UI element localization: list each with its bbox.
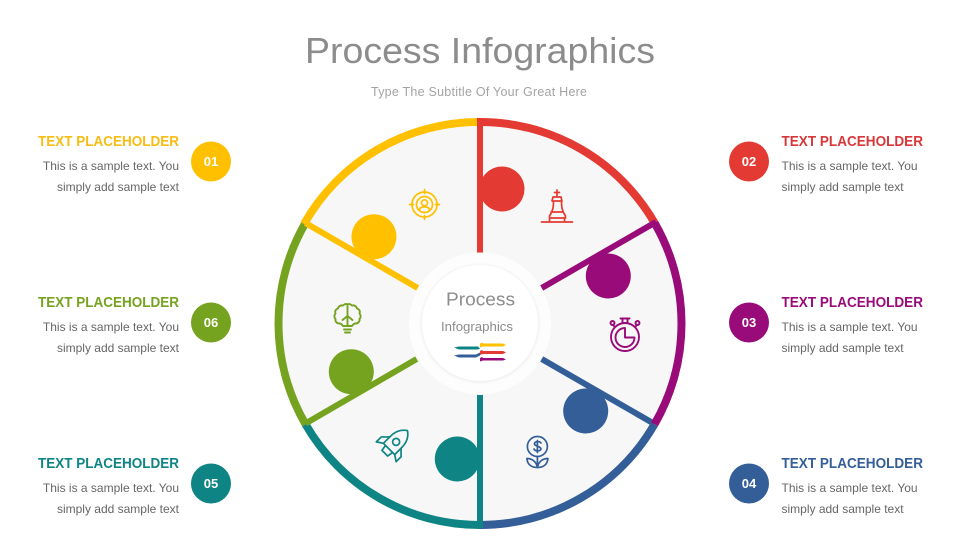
icon: ribbons: [454, 342, 506, 362]
item 05 number: 05: [204, 476, 218, 491]
item 01 heading: TEXT PLACEHOLDER: [38, 134, 179, 150]
icon: rocket: [375, 421, 417, 463]
item 01 number: 01: [204, 154, 218, 169]
title: Process Infographics: [305, 30, 655, 71]
item 01 badge: [191, 142, 231, 182]
item 05 heading: TEXT PLACEHOLDER: [38, 456, 179, 472]
item 02 number: 02: [742, 154, 756, 169]
item 01 body: simply add sample text: [57, 180, 180, 194]
hub inner circle: [422, 265, 538, 381]
hub title: Process: [446, 290, 515, 310]
icon: stopwatch: [610, 318, 640, 351]
hub shadow: [422, 265, 538, 382]
item 04 heading: TEXT PLACEHOLDER: [782, 456, 923, 472]
item 06 body: simply add sample text: [57, 341, 180, 355]
hub outer ring: [409, 252, 551, 394]
item 05 badge: [191, 464, 231, 504]
item 03 body: This is a sample text. You: [782, 320, 918, 334]
item 04: [729, 456, 923, 516]
item 01: [38, 134, 231, 194]
segment 05: teal: [306, 395, 483, 528]
item 05: [38, 456, 231, 516]
segment 06: green: [279, 223, 417, 424]
item 02: [729, 134, 923, 194]
segment 03: purple: [542, 222, 681, 424]
subtitle: Type The Subtitle Of Your Great Here: [371, 85, 587, 99]
item 06 number: 06: [204, 315, 218, 330]
item 03 heading: TEXT PLACEHOLDER: [782, 295, 923, 311]
hub subtitle: Infographics: [441, 319, 514, 334]
item 03 body: simply add sample text: [782, 341, 904, 355]
item 06 body: This is a sample text. You: [43, 320, 179, 334]
item 02 badge: [729, 142, 769, 182]
item 03: [729, 295, 923, 355]
item 03 number: 03: [742, 315, 756, 330]
item 05 body: simply add sample text: [57, 502, 180, 516]
item 02 body: This is a sample text. You: [782, 159, 918, 173]
segment 01: yellow: [304, 122, 478, 288]
segment 04: blue: [480, 359, 654, 525]
item 06 badge: [191, 302, 231, 342]
icon: chess piece: [542, 190, 572, 222]
item 02 body: simply add sample text: [782, 180, 904, 194]
item 05 body: This is a sample text. You: [43, 481, 179, 495]
item 01 body: This is a sample text. You: [43, 159, 179, 173]
item 06 heading: TEXT PLACEHOLDER: [38, 295, 179, 311]
item 06: [38, 295, 231, 355]
item 03 badge: [729, 302, 769, 342]
wheel background: [279, 122, 681, 524]
item 04 badge: [729, 464, 769, 504]
item 04 body: This is a sample text. You: [782, 481, 918, 495]
icon: target person: [410, 190, 440, 220]
icon: money plant: [527, 436, 548, 468]
item 04 number: 04: [742, 476, 757, 491]
item 02 heading: TEXT PLACEHOLDER: [782, 134, 923, 150]
segment 02: red: [477, 119, 654, 253]
item 04 body: simply add sample text: [782, 502, 904, 516]
center hub: [409, 252, 551, 394]
icon: brain bulb: [334, 304, 361, 332]
